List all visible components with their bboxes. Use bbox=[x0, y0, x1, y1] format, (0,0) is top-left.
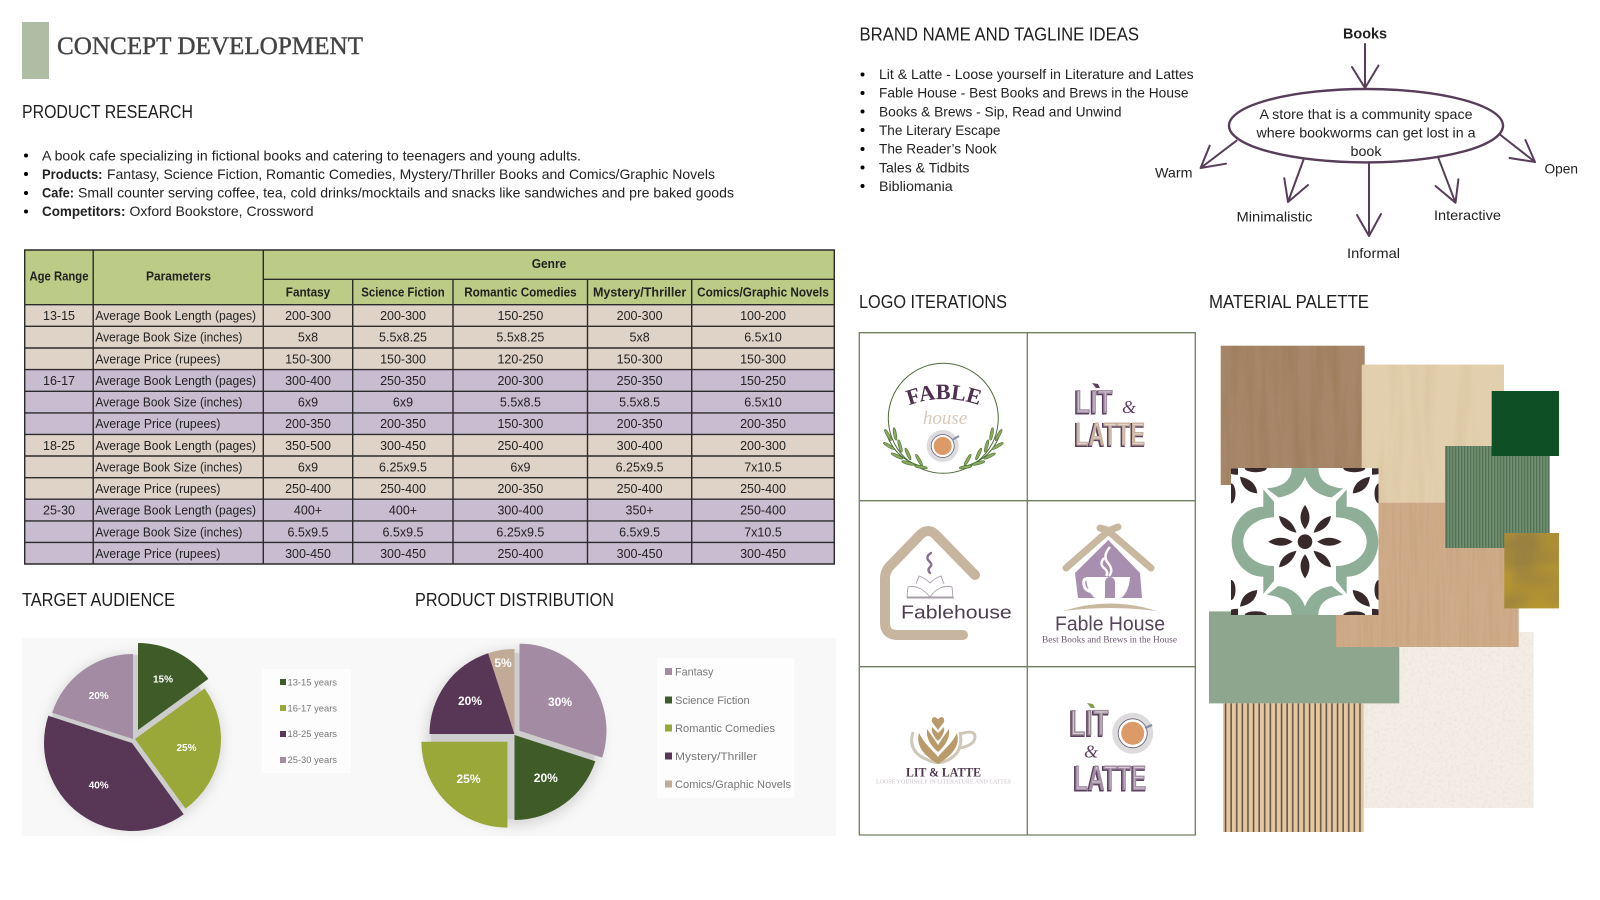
table rows: 200-300 bbox=[740, 439, 786, 453]
logo: Fable house wreath: FABLE bbox=[905, 384, 982, 405]
logo: Fablehouse outline house with book: Fablehouse bbox=[901, 602, 1012, 622]
table header: Genre bbox=[532, 257, 566, 271]
table rows: 150-300 bbox=[497, 417, 543, 431]
logo grid frame bbox=[859, 333, 1195, 835]
arrow: minimalistic bbox=[1284, 160, 1308, 202]
table rows: 250-400 bbox=[617, 482, 663, 496]
arrow: warm bbox=[1201, 141, 1236, 168]
logo: Fablehouse outline house with book bbox=[885, 531, 1012, 635]
swatch: brushed gold bbox=[1504, 533, 1559, 608]
logo: Fable House cottage with cup: Best Books and Brews in the House bbox=[1042, 636, 1177, 646]
pie chart: product distribution: 5% bbox=[494, 656, 512, 670]
text block: brand name bullets: Fable House - Best Books and Brews in the House bbox=[879, 85, 1189, 101]
legend: target audience bbox=[262, 669, 351, 773]
heading: product distribution: PRODUCT DISTRIBUTION bbox=[415, 590, 614, 610]
table rows: 250-400 bbox=[497, 439, 543, 453]
table rows: 100-200 bbox=[740, 309, 786, 323]
legend: target audience: 13-15 years bbox=[288, 678, 337, 688]
pie chart: target audience bbox=[44, 643, 222, 831]
swatch: light oak wood bbox=[1362, 365, 1504, 503]
table rows: 6.25x9.5 bbox=[616, 460, 664, 474]
table rows: 13-15 bbox=[43, 309, 75, 323]
text block: brand name bullets: Books & Brews - Sip, Read and Unwind bbox=[879, 103, 1122, 119]
table rows: 200-300 bbox=[380, 309, 426, 323]
logo: Lit and Latte lettering: LATTE bbox=[1075, 416, 1146, 452]
table rows: 6.25x9.5 bbox=[496, 525, 544, 539]
title accent block bbox=[22, 22, 49, 79]
table rows: 250-400 bbox=[497, 547, 543, 561]
swatch: green ribbed panel bbox=[1445, 446, 1550, 548]
concept ellipse bbox=[1229, 89, 1503, 162]
table header: Parameters bbox=[146, 270, 211, 284]
arrow: informal bbox=[1357, 162, 1381, 236]
table rows: 6.5x9.5 bbox=[287, 525, 329, 539]
table rows: 5x8 bbox=[298, 331, 318, 345]
text block: product research bullets: Fantasy, Science Fiction, Romantic Comedies, Mystery/Thriller Books and Comics/Graphic Novels bbox=[107, 166, 715, 182]
table rows: 25-30 bbox=[43, 504, 75, 518]
text block: brand name bullets bbox=[860, 66, 1194, 194]
table rows: 6.5x9.5 bbox=[619, 525, 660, 539]
table rows: 6.25x9.5 bbox=[379, 460, 427, 474]
pie chart: target audience: 15% bbox=[153, 674, 173, 686]
table rows: 300-400 bbox=[285, 374, 331, 388]
text block: product research bullets: Small counter serving coffee, tea, cold drinks/mocktails and snacks like sandwiches and pre baked goods bbox=[78, 184, 734, 200]
concept text: where bookworms can get lost in a bbox=[1255, 125, 1476, 141]
logo: Fable house wreath: house bbox=[923, 408, 967, 429]
table rows: 150-300 bbox=[380, 352, 426, 366]
label: open: Open bbox=[1544, 160, 1578, 176]
table rows: 6.5x9.5 bbox=[382, 525, 424, 539]
table rows: 200-300 bbox=[617, 309, 663, 323]
table rows: 400+ bbox=[294, 504, 322, 518]
table header: Age Range bbox=[30, 270, 89, 284]
legend: product distribution: Science Fiction bbox=[675, 695, 750, 707]
legend: product distribution: Mystery/Thriller bbox=[675, 751, 757, 763]
material palette collage bbox=[1209, 346, 1559, 832]
legend: product distribution: Romantic Comedies bbox=[675, 723, 775, 735]
logo: Lit and Latte with coffee cup: & bbox=[1084, 742, 1098, 762]
logo: Lit and Latte lettering: & bbox=[1122, 397, 1136, 417]
table rows: 150-300 bbox=[285, 352, 331, 366]
table rows: 400+ bbox=[389, 504, 417, 518]
table rows: 7x10.5 bbox=[744, 525, 782, 539]
table rows: 250-350 bbox=[380, 374, 426, 388]
swatch: sage paint bbox=[1209, 611, 1399, 703]
table rows: 150-250 bbox=[740, 374, 786, 388]
table header: Fantasy bbox=[286, 286, 330, 300]
swatch: wood slats bbox=[1223, 703, 1364, 832]
table rows: 200-350 bbox=[497, 482, 543, 496]
concept text bbox=[1255, 106, 1476, 159]
logo: Lit and Latte with coffee cup: LATTE bbox=[1074, 759, 1147, 798]
table rows: 5.5x8.25 bbox=[379, 331, 427, 345]
logo: Fable House cottage with cup bbox=[1042, 527, 1177, 646]
table rows: 300-400 bbox=[497, 504, 543, 518]
table rows: 6x9 bbox=[298, 460, 318, 474]
swatch: dark green bbox=[1492, 391, 1559, 456]
table rows: 120-250 bbox=[497, 352, 543, 366]
table rows: Average Price (rupees) bbox=[95, 417, 220, 431]
table rows: 250-400 bbox=[285, 482, 331, 496]
pie chart: product distribution: 25% bbox=[456, 772, 481, 786]
table rows: 200-350 bbox=[380, 417, 426, 431]
table: book parameters by age range and genre bbox=[25, 250, 834, 564]
legend: product distribution bbox=[657, 658, 794, 798]
table rows: 250-400 bbox=[740, 504, 786, 518]
table rows: 7x10.5 bbox=[744, 460, 782, 474]
logo: Lit and Latte latte art cup: LIT & LATTE bbox=[906, 765, 981, 780]
table rows: 6x9 bbox=[298, 396, 318, 410]
arrow: open bbox=[1500, 135, 1535, 162]
logo: Lit and Latte latte art cup: LOOSE YOURSELF IN LITERATURE AND LATTES bbox=[876, 780, 1011, 786]
pie chart: product distribution: 20% bbox=[458, 694, 482, 708]
table rows: Average Book Length (pages) bbox=[95, 374, 256, 388]
table rows: 5.5x8.5 bbox=[619, 396, 660, 410]
text block: product research bullets: A book cafe specializing in fictional books and catering to teenagers and young adults. bbox=[42, 147, 581, 163]
text block: brand name bullets: Bibliomania bbox=[879, 178, 953, 194]
heading: product research: PRODUCT RESEARCH bbox=[22, 102, 193, 122]
label: minimalistic: Minimalistic bbox=[1236, 208, 1312, 224]
table rows: 18-25 bbox=[43, 439, 75, 453]
table rows: 300-450 bbox=[740, 547, 786, 561]
legend: product distribution: Fantasy bbox=[675, 666, 714, 678]
table rows: Average Price (rupees) bbox=[95, 352, 220, 366]
swatch: medium oak wood bbox=[1336, 503, 1519, 647]
logo: Lit and Latte latte art cup bbox=[876, 717, 1011, 786]
logo: Lit and Latte with coffee cup: LIT bbox=[1070, 702, 1109, 744]
table rows: 300-400 bbox=[617, 439, 663, 453]
concept text: book bbox=[1350, 143, 1383, 159]
table rows: 6x9 bbox=[510, 460, 531, 474]
legend: target audience: 18-25 years bbox=[288, 729, 337, 740]
text block: product research bullets bbox=[24, 147, 734, 219]
label: warm: Warm bbox=[1155, 165, 1192, 181]
table rows: 5.5x8.25 bbox=[496, 331, 544, 345]
table rows: 150-300 bbox=[740, 352, 786, 366]
table rows: 6.5x10 bbox=[744, 396, 782, 410]
table rows: 150-300 bbox=[617, 352, 663, 366]
logo: Fable House cottage with cup: Fable House bbox=[1055, 614, 1165, 636]
table rows: 300-450 bbox=[617, 547, 663, 561]
text block: brand name bullets: The Literary Escape bbox=[879, 122, 1001, 138]
logo: Lit and Latte lettering: LIT bbox=[1075, 383, 1113, 420]
table rows: Average Book Size (inches) bbox=[95, 460, 242, 474]
table rows: 150-250 bbox=[497, 309, 543, 323]
swatch: patterned tile bbox=[1231, 468, 1378, 615]
label: informal: Informal bbox=[1347, 245, 1400, 261]
table rows: 6.5x10 bbox=[744, 331, 782, 345]
logo: Lit and Latte with coffee cup bbox=[1070, 702, 1153, 798]
table rows: 200-300 bbox=[285, 309, 331, 323]
pie chart: target audience: 40% bbox=[89, 780, 109, 792]
table header: Romantic Comedies bbox=[464, 286, 577, 300]
text block: brand name bullets: The Reader’s Nook bbox=[879, 141, 998, 157]
table rows: 200-350 bbox=[285, 417, 331, 431]
table rows: 200-300 bbox=[497, 374, 543, 388]
table rows: Average Book Length (pages) bbox=[95, 504, 256, 518]
table rows: 250-400 bbox=[380, 482, 426, 496]
label: books: Books bbox=[1343, 26, 1387, 43]
text block: product research bullets: Cafe: bbox=[42, 184, 74, 200]
legend: target audience: 16-17 years bbox=[288, 704, 337, 714]
pie chart: product distribution: 20% bbox=[534, 771, 558, 785]
heading: brand name and tagline ideas: BRAND NAME AND TAGLINE IDEAS bbox=[860, 25, 1139, 45]
swatch: dark oak wood bbox=[1221, 346, 1365, 485]
text block: product research bullets: Competitors: bbox=[42, 203, 126, 219]
table rows: Average Book Size (inches) bbox=[95, 525, 242, 539]
label: interactive: Interactive bbox=[1434, 207, 1501, 223]
text block: brand name bullets: Lit & Latte - Loose yourself in Literature and Lattes bbox=[879, 66, 1194, 82]
table rows: 5x8 bbox=[630, 331, 650, 345]
heading: logo iterations: LOGO ITERATIONS bbox=[859, 292, 1007, 312]
arrow: interactive bbox=[1436, 158, 1458, 203]
pie chart: product distribution: 30% bbox=[548, 695, 572, 709]
heading: material palette: MATERIAL PALETTE bbox=[1209, 292, 1369, 312]
table rows: 16-17 bbox=[43, 374, 75, 388]
swatch: plaster bbox=[1363, 632, 1534, 808]
table rows: 6x9 bbox=[393, 396, 413, 410]
table rows: 300-450 bbox=[380, 547, 426, 561]
table rows bbox=[43, 309, 786, 561]
table rows: 250-400 bbox=[740, 482, 786, 496]
table rows: 250-350 bbox=[617, 374, 663, 388]
concept text: A store that is a community space bbox=[1260, 106, 1473, 122]
logo: Fable house wreath bbox=[883, 362, 1004, 474]
pie chart: target audience: 20% bbox=[89, 691, 109, 702]
table rows: 300-450 bbox=[285, 547, 331, 561]
table rows: Average Book Size (inches) bbox=[95, 331, 242, 345]
table header bbox=[30, 257, 829, 300]
table rows: 350+ bbox=[626, 504, 654, 518]
table header: Science Fiction bbox=[361, 286, 445, 300]
logo: Lit and Latte lettering bbox=[1075, 383, 1146, 452]
legend: product distribution: Comics/Graphic Novels bbox=[675, 779, 792, 791]
arrow: books to concept bbox=[1352, 44, 1378, 88]
text block: product research bullets: Products: bbox=[42, 166, 102, 182]
table rows: 200-350 bbox=[617, 417, 663, 431]
table rows: 200-350 bbox=[740, 417, 786, 431]
table rows: 350-500 bbox=[285, 439, 331, 453]
pie chart: product distribution bbox=[421, 644, 606, 828]
table rows: Average Book Length (pages) bbox=[95, 309, 256, 323]
table rows: Average Book Length (pages) bbox=[95, 439, 256, 453]
title: CONCEPT DEVELOPMENT bbox=[57, 33, 363, 60]
text block: brand name bullets: Tales & Tidbits bbox=[879, 159, 969, 175]
wreath branches bbox=[883, 427, 928, 470]
table rows: Average Price (rupees) bbox=[95, 482, 220, 496]
charts panel background bbox=[22, 638, 836, 836]
pie chart: target audience: 25% bbox=[176, 743, 197, 754]
table rows: 5.5x8.5 bbox=[500, 396, 541, 410]
table header: Mystery/Thriller bbox=[593, 286, 686, 300]
heading: target audience: TARGET AUDIENCE bbox=[22, 590, 175, 610]
text block: product research bullets: Oxford Bookstore, Crossword bbox=[130, 203, 314, 219]
table rows: 300-450 bbox=[380, 439, 426, 453]
table rows: Average Book Size (inches) bbox=[95, 396, 242, 410]
legend: target audience: 25-30 years bbox=[288, 755, 337, 766]
table rows: Average Price (rupees) bbox=[95, 547, 220, 561]
mind map: brand concept bbox=[1155, 26, 1578, 261]
table header: Comics/Graphic Novels bbox=[697, 286, 829, 300]
